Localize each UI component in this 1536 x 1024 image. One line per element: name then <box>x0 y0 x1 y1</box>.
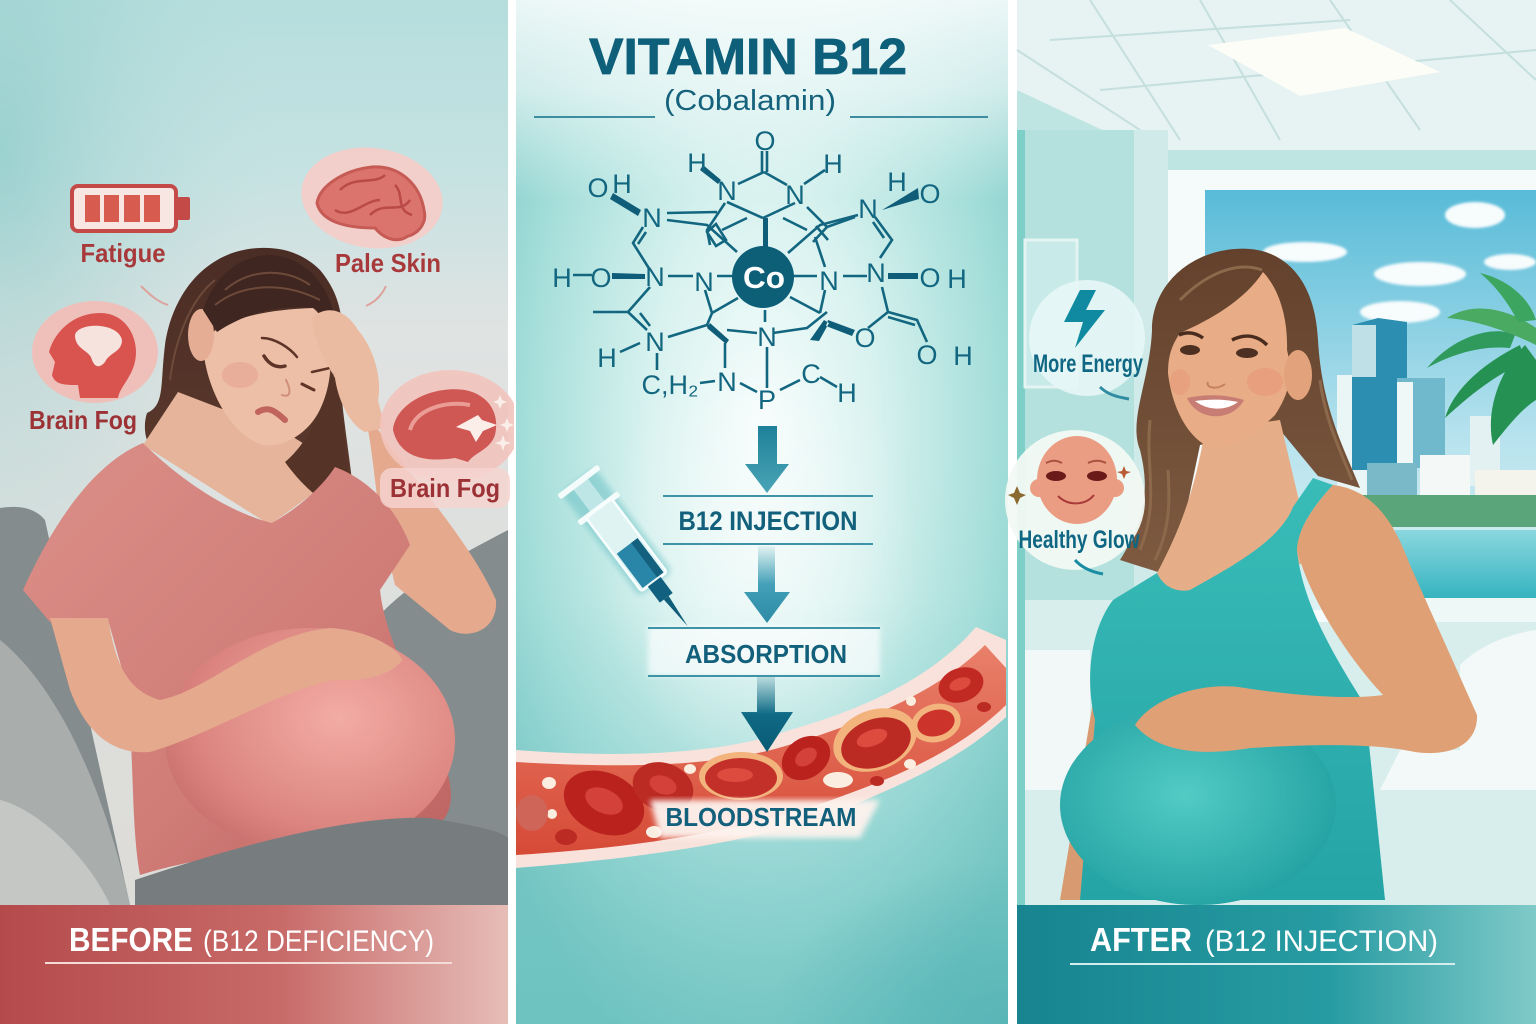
footer banner: before <box>0 905 508 1024</box>
label: Brain Fog <box>29 405 137 435</box>
pink t-shirt <box>23 443 451 875</box>
ear <box>188 309 214 361</box>
icon: brain with sparks <box>393 389 496 462</box>
chemical structure of cobalamin: N <box>866 258 886 288</box>
before label: BEFORE <box>69 921 193 958</box>
closed eyes, brows and mouth <box>258 338 330 420</box>
arrow 2 <box>744 546 790 623</box>
after label: AFTER <box>1090 921 1192 958</box>
pregnant woman, tired <box>23 248 508 905</box>
chemical structure of cobalamin: Co <box>743 260 785 295</box>
water <box>1395 530 1536 598</box>
symptom: brain fog (brain) <box>380 370 520 508</box>
sofa cushion and blanket <box>0 640 130 905</box>
hair side <box>285 373 353 512</box>
chemical structure of cobalamin: H <box>597 343 617 373</box>
facial features <box>1170 333 1283 416</box>
arrow 1 <box>745 426 789 493</box>
label: Brain Fog <box>390 473 500 503</box>
belly <box>165 628 455 852</box>
chemical structure of cobalamin: N <box>858 194 878 224</box>
cobalt center <box>732 246 794 308</box>
footer banner: after <box>1017 905 1536 1024</box>
chemical structure of cobalamin: O <box>919 263 941 293</box>
panel: center (vitamin B12 mechanism) <box>516 0 1008 1024</box>
bed <box>1380 630 1536 790</box>
hair highlights <box>170 273 320 380</box>
arrow 3 <box>741 677 793 752</box>
hand on forehead <box>312 310 385 432</box>
chemical structure of cobalamin: H <box>552 263 572 293</box>
chemical structure of cobalamin: N <box>757 322 777 352</box>
label: More Energy <box>1033 350 1143 378</box>
sofa <box>0 507 508 905</box>
chemical structure of cobalamin: H <box>837 378 857 408</box>
palm tree <box>1427 273 1536 445</box>
cabinet <box>1025 650 1090 790</box>
chemical structure of cobalamin: N <box>785 180 805 210</box>
title: VITAMIN B12 <box>589 28 907 85</box>
label: bloodstream: BLOODSTREAM <box>666 802 856 832</box>
teal tank top <box>1080 478 1385 900</box>
window frame <box>1168 170 1536 622</box>
chemical structure of cobalamin: N <box>717 367 737 397</box>
label: B12 injection: B12 INJECTION <box>678 506 858 536</box>
chemical structure of cobalamin: H <box>887 167 907 197</box>
left arm and hand on belly <box>50 618 402 752</box>
right arm and hand on belly <box>1135 485 1477 753</box>
label: absorption: ABSORPTION <box>685 639 847 669</box>
face <box>203 308 331 445</box>
subtitle: (Cobalamin) <box>664 85 836 117</box>
icon: low battery <box>72 186 190 231</box>
neck and chest <box>1150 420 1310 610</box>
label: Healthy Glow <box>1018 526 1140 554</box>
chemical structure of cobalamin: O <box>590 263 612 293</box>
icon: lightning bolt <box>1064 290 1105 348</box>
chemical structure of cobalamin: N <box>717 176 737 206</box>
symptom: pale skin <box>295 139 449 306</box>
chemical structure of cobalamin: N <box>642 203 662 233</box>
symptom: brain fog (head) <box>29 301 158 435</box>
ceiling <box>1017 0 1536 150</box>
chemical structure of cobalamin: O <box>919 179 941 209</box>
illustration: blood vessel with red blood cells <box>516 627 1006 868</box>
wall <box>1017 130 1168 600</box>
label: Fatigue <box>80 238 166 268</box>
skyline <box>1337 318 1536 527</box>
chemical structure of cobalamin: H <box>687 148 707 178</box>
chemical structure of cobalamin: C,H₂ <box>642 370 698 400</box>
symptom: fatigue <box>72 186 190 305</box>
benefit: more energy <box>1029 280 1145 399</box>
hair back <box>1120 249 1360 572</box>
icon: brain <box>295 139 449 257</box>
fog in head <box>75 326 122 366</box>
window view <box>1205 190 1536 622</box>
hair back <box>145 248 354 512</box>
chemical structure of cobalamin: H <box>947 264 967 294</box>
chemical structure of cobalamin: H <box>823 149 843 179</box>
chemical structure of cobalamin: O <box>754 126 776 156</box>
icon: head silhouette <box>49 313 136 398</box>
chemical structure of cobalamin: N <box>645 327 665 357</box>
face <box>1168 272 1290 448</box>
hair top <box>203 255 335 332</box>
panel: after (B12 injection) <box>1005 0 1536 1024</box>
icon: syringe <box>557 465 708 642</box>
panel: before (B12 deficiency) <box>0 0 520 1024</box>
icon: glowing face <box>1008 436 1131 524</box>
chemical structure of cobalamin: H <box>612 169 632 199</box>
label: Pale Skin <box>335 248 441 278</box>
gray pants <box>135 818 508 905</box>
benefit: healthy glow <box>1005 430 1145 574</box>
subtitle: (B12 DEFICIENCY) <box>203 925 434 958</box>
hair highlights <box>1140 267 1352 560</box>
back arm <box>1060 690 1120 900</box>
chemical structure of cobalamin: H <box>953 341 973 371</box>
neck and chest <box>143 392 345 525</box>
chemical structure of cobalamin: O <box>854 323 876 353</box>
label: bloodstream <box>650 800 880 838</box>
chemical structure of cobalamin: O <box>587 173 609 203</box>
chemical structure of cobalamin: N <box>819 266 839 296</box>
clouds <box>1263 202 1536 323</box>
chemical structure of cobalamin: O <box>916 340 938 370</box>
chemical structure of cobalamin: N <box>645 262 665 292</box>
chemical structure of cobalamin: N <box>694 267 714 297</box>
subtitle: (B12 INJECTION) <box>1205 925 1438 958</box>
ceiling light <box>1208 28 1440 96</box>
pregnant woman, smiling <box>1060 249 1477 905</box>
chemical structure of cobalamin: P <box>758 385 776 415</box>
belly <box>1060 705 1336 905</box>
raised arm <box>368 425 496 634</box>
chemical structure of cobalamin: C <box>801 359 821 389</box>
label: absorption <box>648 626 880 677</box>
chemical structure of cobalamin <box>552 126 973 415</box>
ear <box>1284 350 1312 400</box>
